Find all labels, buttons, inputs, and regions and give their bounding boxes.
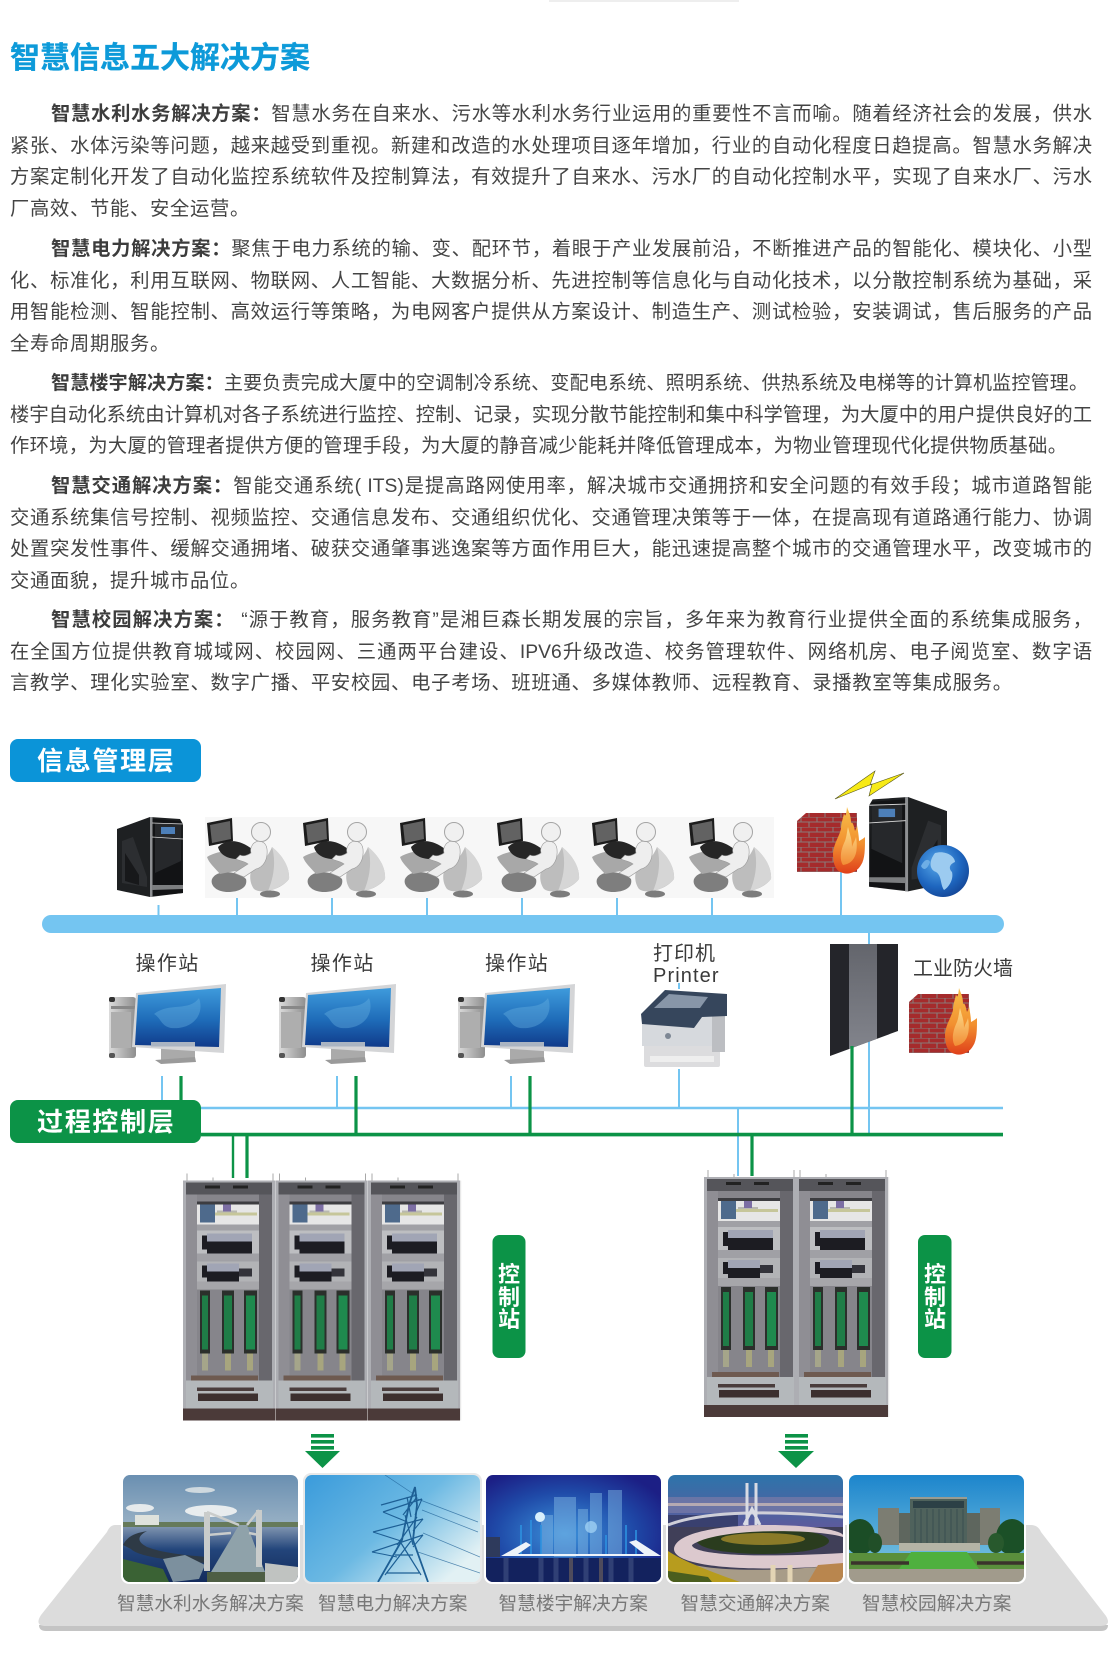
- label: printer: [653, 942, 720, 987]
- text block: water solution: 方案定制化开发了自动化监控系统软件及控制算法，有效提升了自来水、污水厂的自动化控制水平，实现了自来水厂、污水: [10, 167, 1092, 188]
- label: industrial firewall: 工业防火墙: [913, 957, 1013, 980]
- text block: power solution: 全寿命周期服务。: [10, 334, 170, 355]
- network bus: blue backbone with drop lines: [42, 872, 1004, 1135]
- captions: five solutions: 智慧校园解决方案: [862, 1593, 1012, 1614]
- process layer buses and connectors: [162, 1046, 1003, 1178]
- heading badge: process control layer: 过程控制层: [37, 1107, 176, 1137]
- badge: control station right: 控: [924, 1262, 946, 1287]
- text block: water solution: 紧张、水体污染等问题，越来越受到重视。新建和改造的水处理项目逐年增加，行业的自动化程度日趋提高。智慧水务解决: [10, 136, 1092, 157]
- badge: control station right: 制: [924, 1285, 946, 1310]
- text block: building solution: 智慧楼宇解决方案：主要负责完成大厦中的空调制冷系统、变配电系统、照明系统、供热系统及电梯等的计算机监控管理。: [51, 373, 1088, 394]
- text block: building solution: 楼宇自动化系统由计算机对各子系统进行监控、控制、记录，实现分散节能控制和集中科学管理，为大厦中的用户提供良好的工: [10, 405, 1092, 426]
- control cabinets right: [704, 1170, 889, 1417]
- control cabinets left: [183, 1174, 461, 1420]
- photo: traffic ring road: [666, 1473, 845, 1584]
- icon: internet firewall: [797, 807, 865, 874]
- photo: campus building: [845, 1473, 1028, 1584]
- icon: lightning: [835, 771, 904, 799]
- title: 智慧信息五大解决方案: [10, 42, 310, 75]
- text block: power solution: 化、标准化，利用互联网、物联网、人工智能、大数据分析、先进控制等信息化与自动化技术，以分散控制系统为基础，采: [10, 271, 1092, 292]
- badge: control station left: 制: [498, 1285, 520, 1310]
- badge: control station left: 控: [498, 1262, 520, 1287]
- arrow: right down: [778, 1434, 814, 1468]
- text block: traffic solution: 交通面貌，提升城市品位。: [10, 571, 250, 592]
- icon: industrial firewall cabinet: [830, 944, 898, 1059]
- arrow: left down: [305, 1434, 340, 1468]
- text block: traffic solution: 交通系统集信号控制、视频监控、交通信息发布、交通组织优化、交通管理决策等于一体，在提高现有道路通行能力、协调: [10, 508, 1092, 529]
- text block: campus solution: 在全国方位提供教育城域网、校园网、三通两平台建设、IPV6升级改造、校务管理软件、网络机房、电子阅览室、数字语: [10, 642, 1092, 663]
- badge: control station left: [492, 1235, 526, 1358]
- label: workstations: 操作站: [310, 952, 375, 975]
- heading badge: information management layer: [10, 739, 201, 782]
- text block: power solution: [10, 238, 1092, 355]
- photo: power tower: [303, 1473, 482, 1584]
- top edge remnant: [549, 0, 739, 2]
- text block: campus solution: [10, 609, 1092, 694]
- captions: five solutions: 智慧楼宇解决方案: [498, 1593, 648, 1614]
- label: workstations: [136, 952, 549, 975]
- badge: control station right: 站: [924, 1307, 946, 1332]
- text block: water solution: 厂高效、节能、安全运营。: [10, 199, 250, 220]
- text block: building solution: 作环境，为大厦的管理者提供方便的管理手段，为大厦的静音减少能耗并降低管理成本，为物业管理现代化提供物质基础。: [10, 436, 1067, 457]
- icon: server left: [117, 817, 183, 897]
- text block: water solution: [10, 103, 1092, 220]
- text block: campus solution: 智慧校园解决方案： “源于教育，服务教育”是湘巨森长期发展的宗旨，多年来为教育行业提供全面的系统集成服务，: [51, 610, 1092, 631]
- heading badge: information management layer: 信息管理层: [37, 746, 176, 776]
- captions: five solutions: 智慧电力解决方案: [318, 1593, 468, 1614]
- text block: power solution: 智慧电力解决方案：聚焦于电力系统的输、变、配环节，着眼于产业发展前沿，不断推进产品的智能化、模块化、小型: [51, 239, 1092, 260]
- label: printer: 打印机: [653, 942, 716, 965]
- badge: control station right: [918, 1235, 952, 1358]
- icon: workstation 3: [458, 984, 575, 1064]
- icon: industrial firewall brick: [909, 988, 977, 1055]
- text block: power solution: 用智能检测、智能控制、高效运行等策略，为电网客户提供从方案设计、制造生产、测试检验，安装调试，售后服务的产品: [10, 302, 1092, 323]
- icon: printer: [641, 983, 727, 1067]
- panel: six operator figures: [205, 817, 775, 898]
- text block: traffic solution: 处置突发性事件、缓解交通拥堵、破获交通肇事逃逸案等方面作用巨大，能迅速提高整个城市的交通管理水平，改变城市的: [10, 539, 1092, 560]
- label: workstations: 操作站: [485, 952, 549, 975]
- label: printer: Printer: [653, 965, 720, 987]
- text block: campus solution: 言教学、理化实验室、数字广播、平安校园、电子考场、班班通、多媒体教师、远程教育、录播教室等集成服务。: [10, 673, 1012, 694]
- platform: [38, 1525, 1108, 1631]
- text block: building solution: [10, 372, 1092, 457]
- icon: workstation 1: [109, 984, 226, 1064]
- photo: water treatment: [121, 1473, 300, 1584]
- text block: water solution: 智慧水利水务解决方案：智慧水务在自来水、污水等水利水务行业运用的重要性不言而喻。随着经济社会的发展，供水: [51, 104, 1092, 125]
- text block: traffic solution: 智慧交通解决方案：智能交通系统( ITS)是提高路网使用率，解决城市交通拥挤和安全问题的有效手段；城市道路智能: [51, 476, 1092, 497]
- text block: traffic solution: [10, 475, 1092, 592]
- captions: five solutions: 智慧水利水务解决方案: [117, 1593, 304, 1614]
- badge: control station left: 站: [498, 1307, 520, 1332]
- captions: five solutions: 智慧交通解决方案: [680, 1593, 830, 1614]
- icon: workstation 2: [279, 984, 396, 1064]
- label: workstations: 操作站: [136, 952, 200, 975]
- photo: smart building: [484, 1473, 663, 1584]
- heading badge: process control layer: [10, 1100, 201, 1143]
- captions: five solutions: [117, 1593, 1012, 1614]
- icon: internet server with globe: [869, 797, 969, 897]
